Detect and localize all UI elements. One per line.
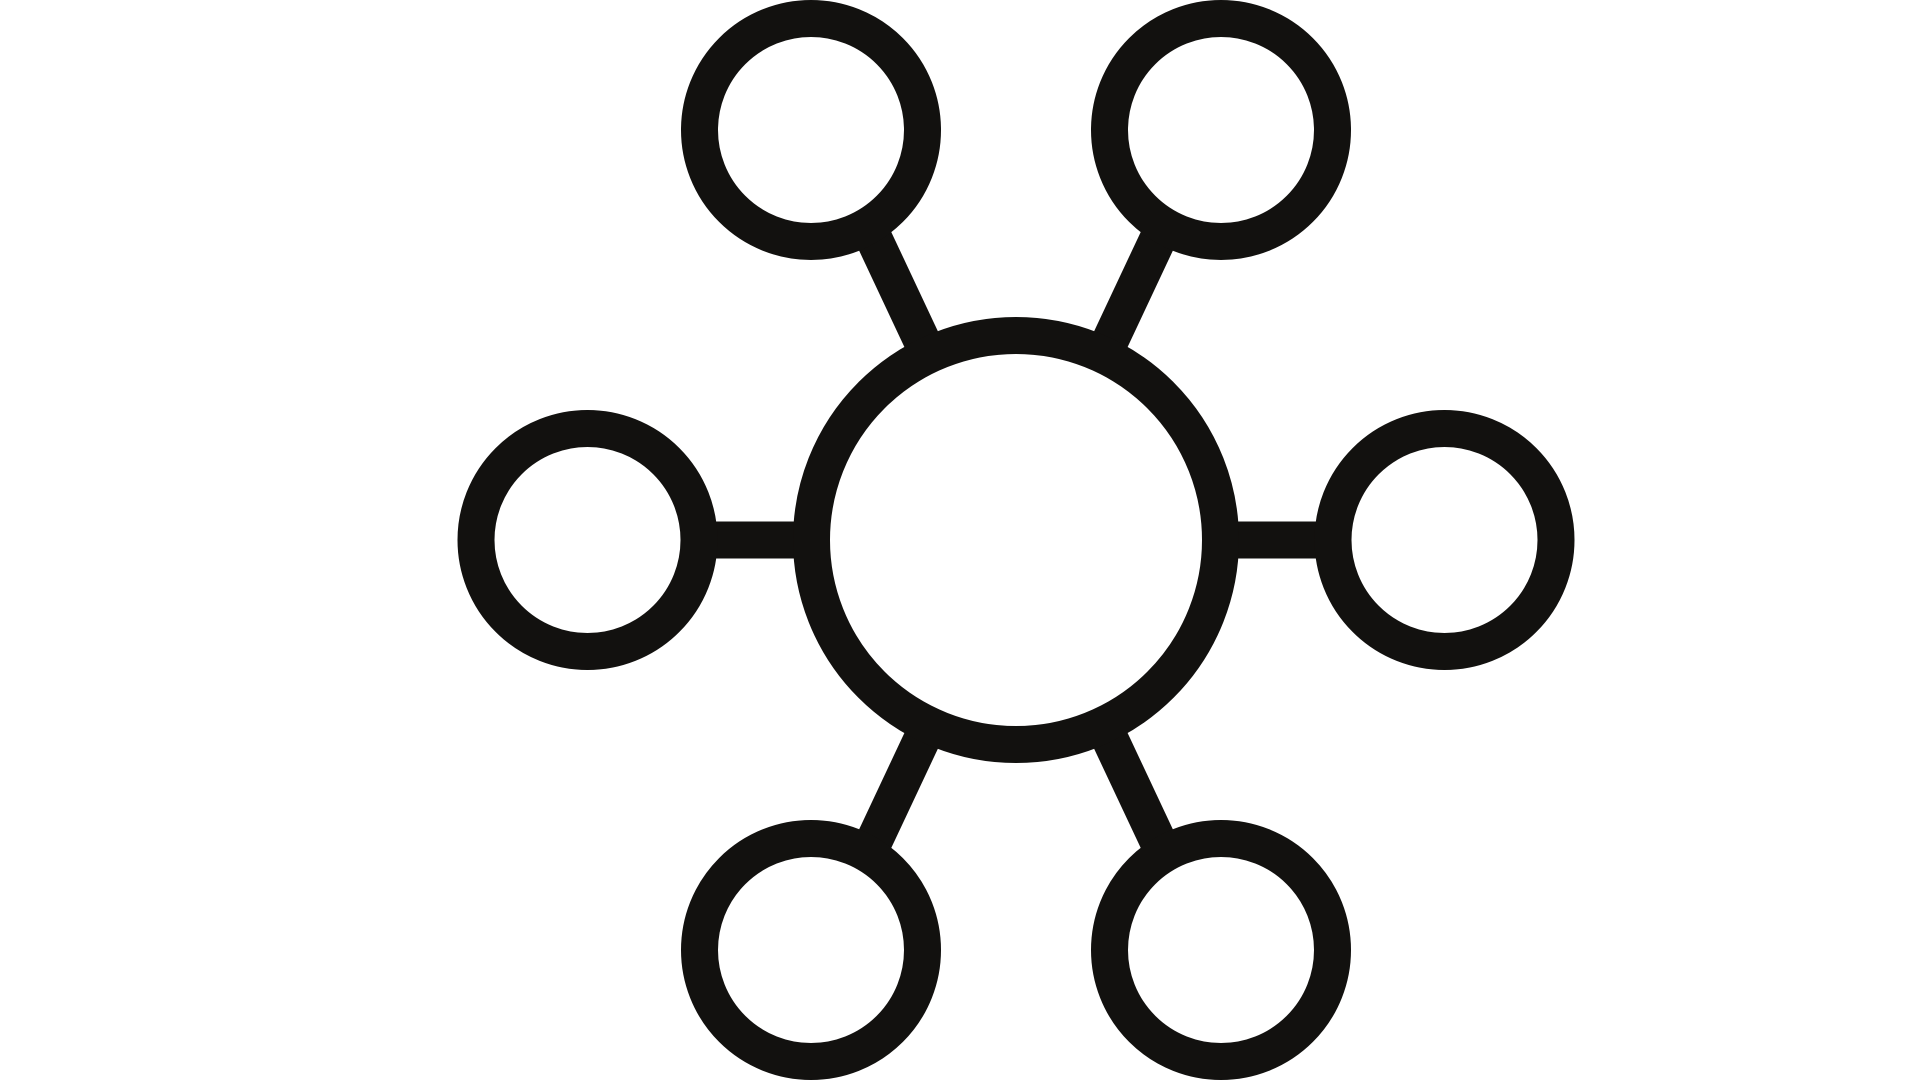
satellite node: right — [1333, 428, 1556, 652]
connector: top right — [1102, 226, 1164, 358]
connector: right — [1217, 522, 1332, 558]
satellite node: left — [476, 428, 699, 652]
central hub circle — [812, 336, 1220, 744]
connector: bottom left — [868, 722, 930, 854]
satellite node: top right — [1110, 18, 1332, 242]
satellite node: bottom left — [700, 838, 922, 1062]
connector: bottom right — [1102, 722, 1164, 854]
satellite node: top left — [700, 18, 922, 242]
connector: left — [700, 522, 815, 558]
satellite node: bottom right — [1110, 838, 1332, 1062]
connector: top left — [868, 226, 930, 358]
